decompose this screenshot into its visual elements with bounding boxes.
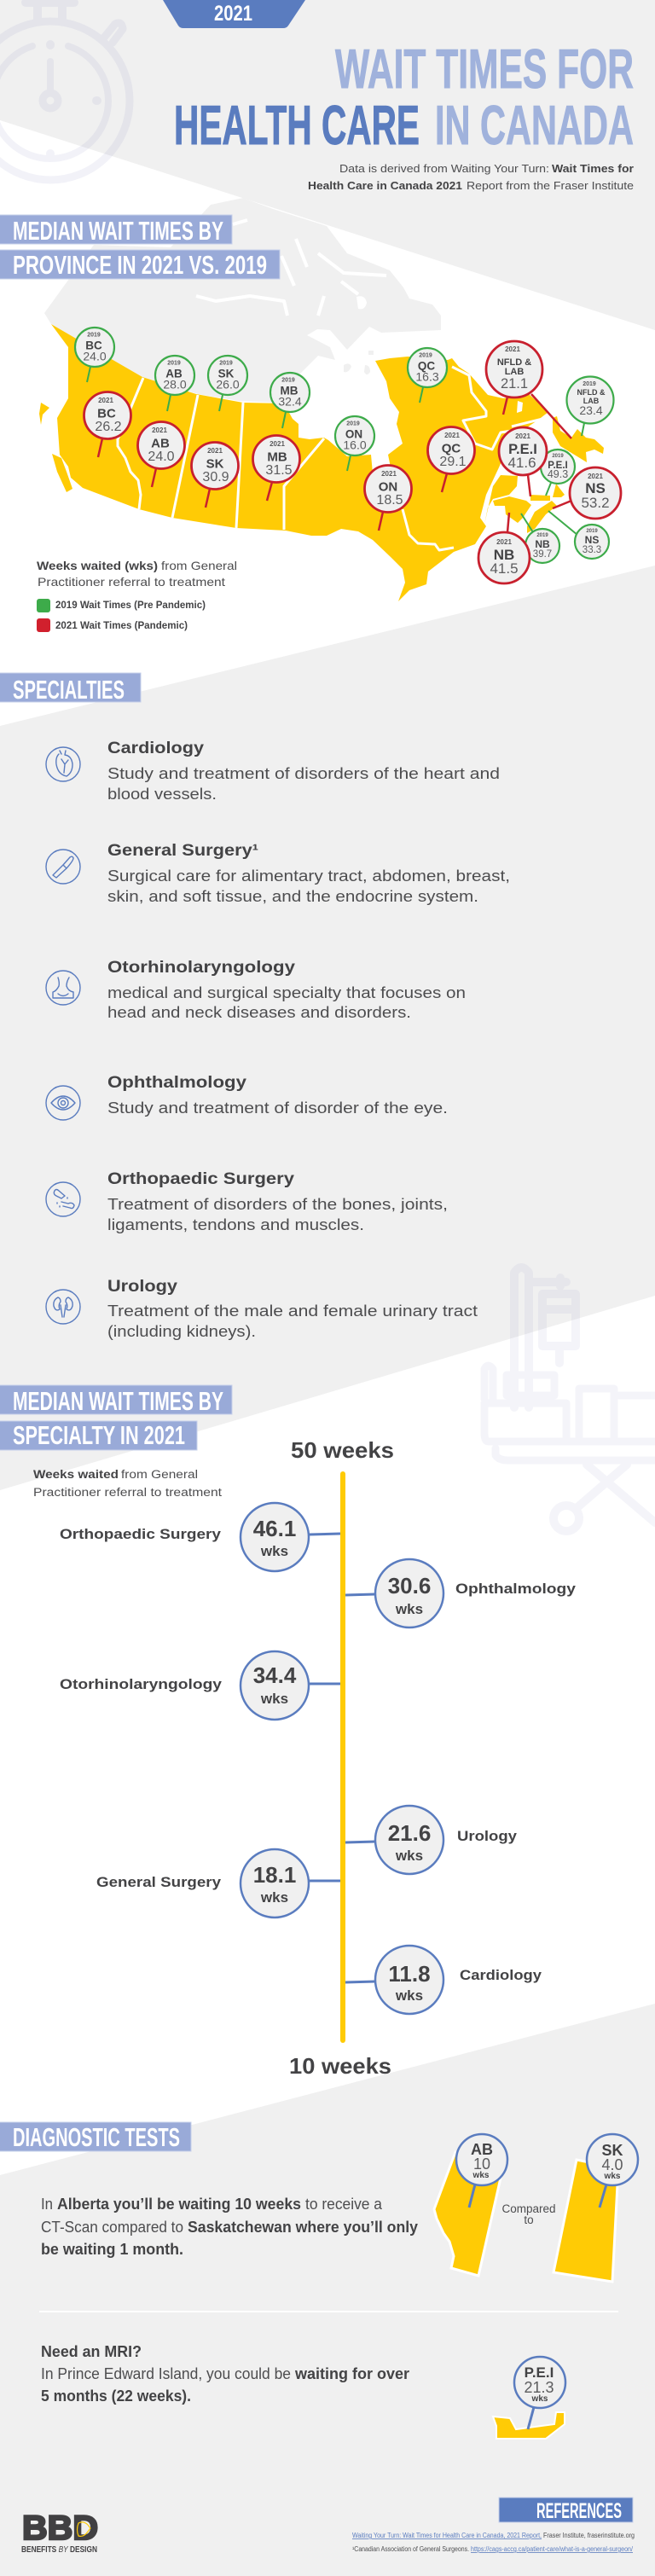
tab: year 2021: 2021 bbox=[214, 2, 252, 26]
specialty: urology: (including kidneys). bbox=[107, 1323, 256, 1340]
specialty: ophthalmology bbox=[46, 1073, 448, 1120]
pin: NS 2021: 2021 bbox=[588, 473, 603, 480]
axis: wait time scale bbox=[340, 1471, 345, 2043]
map pin: Saskatchewan CT scan: wks bbox=[604, 2172, 621, 2181]
pin: ON 2019 bbox=[335, 416, 374, 471]
bubble: general surgery 18.1: General Surgery bbox=[96, 1874, 222, 1890]
pin: NB 2019: 39.7 bbox=[533, 549, 552, 560]
text: MRI wait: 5 months (22 weeks). bbox=[41, 2387, 191, 2405]
pin: MB 2021 bbox=[252, 435, 300, 501]
pin: BC 2019: BC bbox=[85, 339, 102, 351]
bubble: orthopaedic surgery 46.1: 46.1 bbox=[253, 1516, 296, 1541]
specialty: orthopaedic surgery: Treatment of disorders of the bones, joints, bbox=[107, 1196, 448, 1213]
pin: NB 2021: 2021 bbox=[496, 538, 512, 546]
pin: MB 2021: 31.5 bbox=[265, 463, 293, 478]
map pin: Alberta CT scan: AB bbox=[471, 2141, 493, 2158]
map pin: PEI MRI bbox=[493, 2357, 565, 2439]
pin: PEI 2021 bbox=[499, 427, 547, 496]
note: weeks waited: Practitioner referral to treatment bbox=[33, 1486, 222, 1499]
pin: SK 2019: 26.0 bbox=[216, 377, 240, 391]
pin: MB 2021: 2021 bbox=[270, 440, 285, 448]
pin: NFLD and LAB 2019: LAB bbox=[583, 397, 600, 405]
pin: NFLD and LAB 2019: NFLD & bbox=[577, 388, 606, 397]
pin: ON 2021: 2021 bbox=[381, 470, 397, 478]
pin: NFLD and LAB 2021: 21.1 bbox=[501, 376, 528, 392]
pin: AB 2019: 2019 bbox=[167, 360, 181, 367]
specialty: general surgery: skin, and soft tissue, and the endocrine system. bbox=[107, 888, 478, 905]
pin: NB 2021: NB bbox=[494, 547, 514, 563]
heading: median wait times by province: MEDIAN WAIT TIMES BY bbox=[13, 216, 223, 246]
bubble: cardiology 11.8: Cardiology bbox=[460, 1967, 542, 1983]
text: references list: https://cags-accg.ca/patient-care/what-is-a-general-surgeon/ bbox=[471, 2545, 634, 2553]
pin: ON 2019: ON bbox=[345, 428, 362, 440]
pin: NFLD and LAB 2019: 2019 bbox=[583, 381, 596, 387]
bubble: general surgery 18.1: 18.1 bbox=[253, 1862, 296, 1888]
text: CT scan comparison: be waiting 1 month. bbox=[41, 2241, 183, 2258]
bubble: otorhinolaryngology 34.4 bbox=[60, 1651, 340, 1720]
pin: NS 2019: NS bbox=[585, 534, 599, 546]
pin: PEI 2019: 49.3 bbox=[548, 468, 568, 480]
heading: median wait times by specialty: SPECIALTY IN 2021 bbox=[13, 1420, 185, 1450]
legend: 2021 wait times bbox=[37, 618, 188, 632]
note: weeks waited: from General bbox=[121, 1468, 198, 1481]
bubble: urology 21.6: 21.6 bbox=[388, 1820, 431, 1846]
pin: SK 2019: 2019 bbox=[219, 360, 233, 367]
icon: kidneys bbox=[46, 1290, 80, 1324]
axis label: 10 weeks: 10 weeks bbox=[289, 2053, 391, 2079]
label: compared to: Compared bbox=[501, 2202, 556, 2215]
specialty: cardiology: blood vessels. bbox=[107, 786, 217, 803]
pin: NFLD and LAB 2021 bbox=[486, 341, 571, 438]
pin: NS 2021: 53.2 bbox=[581, 495, 610, 511]
specialty: otorhinolaryngology: head and neck diseases and disorders. bbox=[107, 1004, 411, 1021]
specialty: general surgery: General Surgery¹ bbox=[107, 841, 258, 860]
pin: AB 2021: 24.0 bbox=[148, 450, 175, 464]
pin: ON 2019: 16.0 bbox=[343, 438, 367, 452]
bubble: urology 21.6: wks bbox=[395, 1848, 423, 1864]
text: MRI wait bbox=[41, 2343, 409, 2405]
text: MRI wait: waiting for over bbox=[294, 2365, 409, 2382]
pin: PEI 2021: 41.6 bbox=[507, 455, 536, 471]
heading: specialties bbox=[0, 673, 141, 705]
specialty: ophthalmology: Study and treatment of disorder of the eye. bbox=[107, 1099, 448, 1117]
specialty: urology: Urology bbox=[107, 1277, 177, 1296]
pin: BC 2021: BC bbox=[97, 406, 116, 421]
pin: SK 2021: SK bbox=[206, 457, 224, 471]
icon: hospital bed and IV watermark bbox=[484, 1268, 655, 1531]
specialty: urology: Treatment of the male and female urinary tract bbox=[107, 1303, 478, 1320]
bubble: cardiology 11.8: wks bbox=[395, 1987, 423, 2004]
pin: NFLD and LAB 2021: NFLD & bbox=[497, 357, 531, 368]
pin: QC 2021: QC bbox=[442, 442, 461, 455]
legend: 2019 wait times bbox=[37, 599, 206, 612]
bubble: cardiology 11.8: 11.8 bbox=[388, 1961, 431, 1987]
bubble: ophthalmology 30.6: wks bbox=[395, 1601, 423, 1617]
map pin: PEI MRI: 21.3 bbox=[524, 2379, 554, 2396]
pin: MB 2019: MB bbox=[280, 384, 299, 397]
map pin: Alberta CT scan: 10 bbox=[473, 2155, 490, 2173]
specialty: cardiology bbox=[46, 739, 500, 803]
pin: QC 2021: 29.1 bbox=[439, 455, 467, 469]
pin: NS 2019: 2019 bbox=[586, 529, 598, 534]
pin: AB 2021: AB bbox=[151, 437, 170, 450]
specialty: otorhinolaryngology: Otorhinolaryngology bbox=[107, 958, 295, 977]
pin: ON 2021: 18.5 bbox=[376, 493, 403, 508]
bubble: orthopaedic surgery 46.1 bbox=[60, 1503, 340, 1571]
legend: 2021 wait times: 2021 Wait Times (Pandemic) bbox=[55, 621, 188, 631]
pin: QC 2019: 2019 bbox=[419, 353, 432, 358]
logo: Benefits by Design: BENEFITS BY DESIGN bbox=[21, 2545, 97, 2555]
pin: NS 2019 bbox=[548, 511, 609, 559]
map pin: Alberta CT scan bbox=[434, 2134, 507, 2276]
axis label: 50 weeks: 50 weeks bbox=[291, 1437, 394, 1463]
pin: SK 2019 bbox=[208, 356, 247, 411]
bubble: urology 21.6: Urology bbox=[457, 1828, 518, 1844]
pin: AB 2019: 28.0 bbox=[163, 377, 187, 391]
map pin: Saskatchewan CT scan: 4.0 bbox=[601, 2156, 623, 2173]
legend: weeks waited note bbox=[37, 559, 237, 589]
pin: SK 2021 bbox=[191, 442, 239, 508]
bubble: orthopaedic surgery 46.1: Orthopaedic Surgery bbox=[60, 1526, 222, 1542]
text: CT scan comparison: In bbox=[41, 2196, 53, 2213]
pin: MB 2019: 2019 bbox=[281, 377, 295, 384]
pin: PEI 2019: 2019 bbox=[552, 454, 564, 459]
map pin: Alberta CT scan: wks bbox=[472, 2171, 490, 2180]
pin: NFLD and LAB 2019: 23.4 bbox=[579, 403, 603, 417]
text: references list bbox=[352, 2532, 635, 2553]
pin: AB 2021: 2021 bbox=[152, 426, 167, 434]
pin: NB 2019: NB bbox=[535, 538, 550, 550]
pin: AB 2021 bbox=[138, 421, 184, 487]
legend: weeks waited note: Practitioner referral to treatment bbox=[38, 575, 225, 589]
pin: QC 2021: 2021 bbox=[444, 432, 460, 439]
pin: MB 2021: MB bbox=[267, 450, 287, 464]
text: references list: ¹Canadian Association of General Surgeons. bbox=[352, 2545, 469, 2553]
bubble: ophthalmology 30.6 bbox=[345, 1559, 577, 1627]
logo: Benefits by Design: BBD bbox=[22, 2509, 98, 2547]
specialty: otorhinolaryngology: medical and surgical specialty that focuses on bbox=[107, 984, 466, 1001]
text: MRI wait: In Prince Edward Island, you could be bbox=[41, 2365, 291, 2382]
pin: SK 2021: 30.9 bbox=[202, 470, 229, 484]
text: MRI wait: Need an MRI? bbox=[41, 2343, 142, 2360]
pin: NS 2019: 33.3 bbox=[583, 545, 601, 555]
bubble: general surgery 18.1: wks bbox=[260, 1889, 288, 1906]
pin: ON 2021 bbox=[365, 466, 411, 531]
text: references list: Fraser Institute, fraserinstitute.org bbox=[543, 2532, 635, 2539]
text: references list: Waiting Your Turn: Wait Times for Health Care in Canada, 2021 Report, bbox=[352, 2532, 542, 2539]
specialty: orthopaedic surgery: ligaments, tendons and muscles. bbox=[107, 1216, 364, 1233]
pin: NS 2021: NS bbox=[585, 480, 606, 496]
text: CT scan comparison: Alberta you’ll be waiting 10 weeks bbox=[57, 2196, 301, 2213]
pin: PEI 2021: 2021 bbox=[515, 432, 530, 440]
pin: QC 2019: QC bbox=[418, 360, 435, 372]
heading: references bbox=[499, 2498, 633, 2523]
pin: MB 2019: 32.4 bbox=[278, 394, 302, 408]
pin: NFLD and LAB 2021: 2021 bbox=[505, 345, 520, 353]
specialty: general surgery bbox=[46, 841, 510, 905]
pin: BC 2021: 26.2 bbox=[95, 420, 122, 434]
pin: NB 2019 bbox=[521, 513, 559, 563]
pin: ON 2021: ON bbox=[379, 479, 397, 495]
map pin: PEI MRI: wks bbox=[531, 2394, 548, 2404]
pin: BC 2019: 2019 bbox=[87, 333, 101, 338]
map: Canada provinces bbox=[39, 324, 604, 601]
subtitle: data source: Report from the Fraser Institute bbox=[467, 179, 634, 192]
pin: MB 2019 bbox=[270, 373, 310, 428]
specialty: orthopaedic surgery: Orthopaedic Surgery bbox=[107, 1169, 294, 1188]
pin: QC 2019 bbox=[408, 348, 447, 403]
specialty: urology bbox=[46, 1277, 478, 1340]
pin: QC 2019: 16.3 bbox=[415, 370, 439, 384]
text: CT scan comparison: to receive a bbox=[305, 2196, 383, 2213]
heading: median wait times by province bbox=[0, 215, 280, 280]
heading: median wait times by specialty bbox=[0, 1385, 232, 1450]
pin: BC 2021 bbox=[84, 392, 131, 457]
title: HEALTH CARE bbox=[174, 94, 420, 156]
subtitle: data source: Health Care in Canada 2021 bbox=[308, 179, 462, 192]
pin: NB 2021 bbox=[478, 513, 530, 583]
icon: stopwatch watermark bbox=[0, 3, 130, 180]
pin: AB 2019: AB bbox=[165, 367, 183, 380]
label: compared to: to bbox=[524, 2213, 534, 2226]
text: CT scan comparison: Saskatchewan where you’ll only bbox=[188, 2219, 418, 2236]
pin: NS 2021 bbox=[553, 467, 621, 519]
bubble: general surgery 18.1 bbox=[96, 1849, 340, 1917]
pin: ON 2019: 2019 bbox=[346, 421, 360, 426]
pin: NFLD and LAB 2021: LAB bbox=[505, 367, 524, 377]
pin: QC 2021 bbox=[428, 426, 474, 492]
note: weeks waited: Weeks waited bbox=[33, 1468, 119, 1481]
tab: year 2021 bbox=[163, 0, 305, 28]
bubble: otorhinolaryngology 34.4: 34.4 bbox=[253, 1662, 297, 1688]
pin: SK 2021: 2021 bbox=[207, 447, 223, 455]
subtitle: data source: Wait Times for bbox=[552, 162, 634, 175]
bubble: cardiology 11.8 bbox=[345, 1946, 542, 2014]
specialty: cardiology: Study and treatment of disorders of the heart and bbox=[107, 765, 500, 782]
subtitle: data source: Data is derived from Waiting Your Turn: bbox=[339, 162, 549, 175]
bubble: orthopaedic surgery 46.1: wks bbox=[260, 1543, 288, 1559]
heading: diagnostic tests: DIAGNOSTIC TESTS bbox=[13, 2122, 180, 2152]
map pin: PEI MRI: P.E.I bbox=[525, 2364, 554, 2381]
heading: diagnostic tests bbox=[0, 2122, 191, 2152]
label: compared to bbox=[501, 2202, 556, 2226]
icon: scalpel bbox=[46, 850, 80, 884]
bubble: ophthalmology 30.6: 30.6 bbox=[388, 1573, 431, 1598]
heading: specialties: SPECIALTIES bbox=[13, 675, 125, 705]
map pin: Saskatchewan CT scan: SK bbox=[601, 2142, 623, 2159]
pin: BC 2019: 24.0 bbox=[83, 350, 107, 363]
pin: AB 2019 bbox=[155, 356, 194, 411]
legend: weeks waited note: from General bbox=[161, 559, 237, 572]
title bbox=[174, 38, 634, 156]
specialty: orthopaedic surgery bbox=[46, 1169, 448, 1233]
heading: median wait times by province: PROVINCE IN 2021 VS. 2019 bbox=[13, 250, 267, 280]
pin: NB 2019: 2019 bbox=[536, 533, 548, 538]
specialty: ophthalmology: Ophthalmology bbox=[107, 1073, 246, 1092]
bubble: otorhinolaryngology 34.4: Otorhinolaryngology bbox=[60, 1676, 223, 1692]
map pin: Saskatchewan CT scan bbox=[554, 2134, 638, 2282]
pin: PEI 2021: P.E.I bbox=[508, 442, 537, 457]
pin: PEI 2019 bbox=[541, 450, 575, 496]
note: weeks waited bbox=[33, 1468, 222, 1499]
pin: PEI 2019: P.E.I bbox=[548, 461, 568, 471]
specialty: otorhinolaryngology bbox=[46, 958, 466, 1021]
pin: SK 2019: SK bbox=[218, 367, 235, 380]
pin: BC 2021: 2021 bbox=[98, 397, 113, 404]
specialty: general surgery: Surgical care for alimentary tract, abdomen, breast, bbox=[107, 867, 510, 885]
text: CT scan comparison: CT-Scan compared to bbox=[41, 2219, 183, 2236]
bubble: urology 21.6 bbox=[345, 1806, 518, 1874]
icon: heart bbox=[46, 747, 80, 781]
pin: NFLD and LAB 2019 bbox=[566, 377, 614, 436]
map: northern territories background bbox=[44, 198, 441, 403]
text: CT scan comparison bbox=[41, 2196, 418, 2258]
icon: broken bone bbox=[46, 1182, 80, 1216]
icon: eye bbox=[46, 1086, 80, 1120]
legend: weeks waited note: Weeks waited (wks) bbox=[37, 559, 158, 572]
subtitle: data source bbox=[308, 162, 634, 192]
bubble: otorhinolaryngology 34.4: wks bbox=[260, 1691, 288, 1707]
bubble: ophthalmology 30.6: Ophthalmology bbox=[455, 1581, 577, 1597]
pin: NB 2021: 41.5 bbox=[490, 560, 519, 577]
pin: BC 2019 bbox=[75, 328, 114, 382]
heading: median wait times by specialty: MEDIAN WAIT TIMES BY bbox=[13, 1386, 223, 1416]
specialty: cardiology: Cardiology bbox=[107, 739, 204, 757]
icon: neck bbox=[46, 971, 80, 1005]
legend: 2019 wait times: 2019 Wait Times (Pre Pandemic) bbox=[55, 600, 206, 611]
